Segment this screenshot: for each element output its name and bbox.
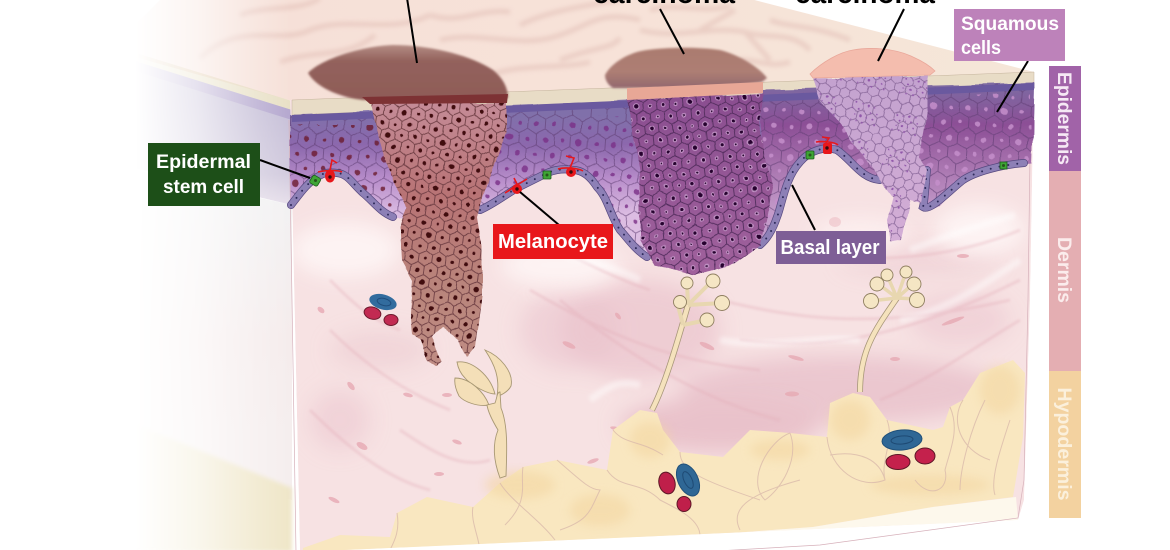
label: melanocyte — [493, 224, 613, 259]
left side face — [152, 62, 294, 550]
tumour: melanoma column — [370, 103, 507, 367]
leader lines — [260, 0, 1028, 230]
surface lesion: melanoma — [308, 45, 508, 104]
vessels: dermis — [363, 291, 398, 326]
vessels: fat centre — [656, 460, 704, 512]
blood vessels — [363, 291, 935, 512]
label: basal layer: Basal layer — [780, 237, 880, 259]
surface lesion: squamous cell carcinoma — [810, 48, 935, 78]
vessels: fat right — [881, 428, 935, 470]
lower fat strip — [748, 497, 1018, 532]
gland: middle — [652, 274, 730, 410]
tumour: squamous cell carcinoma column — [813, 75, 928, 242]
upper dark band of epidermis — [292, 83, 1034, 122]
right epidermis colour — [760, 83, 1034, 247]
gland: left — [455, 350, 511, 478]
label: melanocyte: Melanocyte — [498, 231, 608, 253]
layer bar: hypodermis: Hypodermis — [1053, 388, 1074, 500]
tumour: basal cell carcinoma column — [627, 93, 773, 275]
dermis — [290, 72, 1034, 550]
skin cross-section infographic — [148, 0, 1081, 550]
label: squamous cells — [954, 9, 1065, 61]
basal layer — [291, 148, 1024, 257]
label: epidermal stem cell — [148, 143, 260, 206]
stratum corneum — [292, 72, 1034, 115]
fat shading — [485, 366, 1020, 526]
gland: right — [860, 266, 924, 392]
label: squamous cells: cells — [961, 37, 1001, 59]
layer bar: dermis — [1049, 171, 1081, 371]
surface lesion: basal cell carcinoma — [605, 48, 767, 100]
label: epidermal stem cell: Epidermal — [156, 151, 251, 173]
glands — [455, 266, 924, 478]
dermis pale zones — [290, 205, 1025, 287]
front face edge lines — [289, 85, 1031, 550]
layer bar: epidermis — [1049, 66, 1081, 171]
fat layer: hypodermis — [300, 360, 1025, 550]
right epidermis nuclei — [762, 93, 1032, 218]
dermis shading — [310, 244, 1010, 453]
layer bar: dermis: Dermis — [1053, 237, 1074, 303]
dermis fibres — [310, 230, 1020, 490]
layer bar: hypodermis — [1049, 371, 1081, 518]
stem cells — [309, 151, 1007, 187]
left epidermis nuclei — [290, 124, 392, 207]
layer bar: epidermis: Epidermis — [1053, 72, 1074, 165]
label: epidermal stem cell: stem cell — [163, 176, 244, 198]
dermis pink marks — [316, 217, 969, 504]
melanocytes and stem cells — [309, 137, 1007, 194]
label: squamous cells: Squamous — [961, 13, 1059, 35]
label: basal layer — [776, 231, 886, 264]
centre epidermis nuclei — [485, 116, 640, 224]
fat cell outlines — [390, 400, 1010, 550]
dermis highlights — [545, 215, 1020, 400]
top skin surface — [110, 0, 1034, 101]
epidermis layer — [290, 72, 1034, 258]
surface skin veins — [228, 0, 850, 74]
melanocytes — [325, 143, 832, 194]
